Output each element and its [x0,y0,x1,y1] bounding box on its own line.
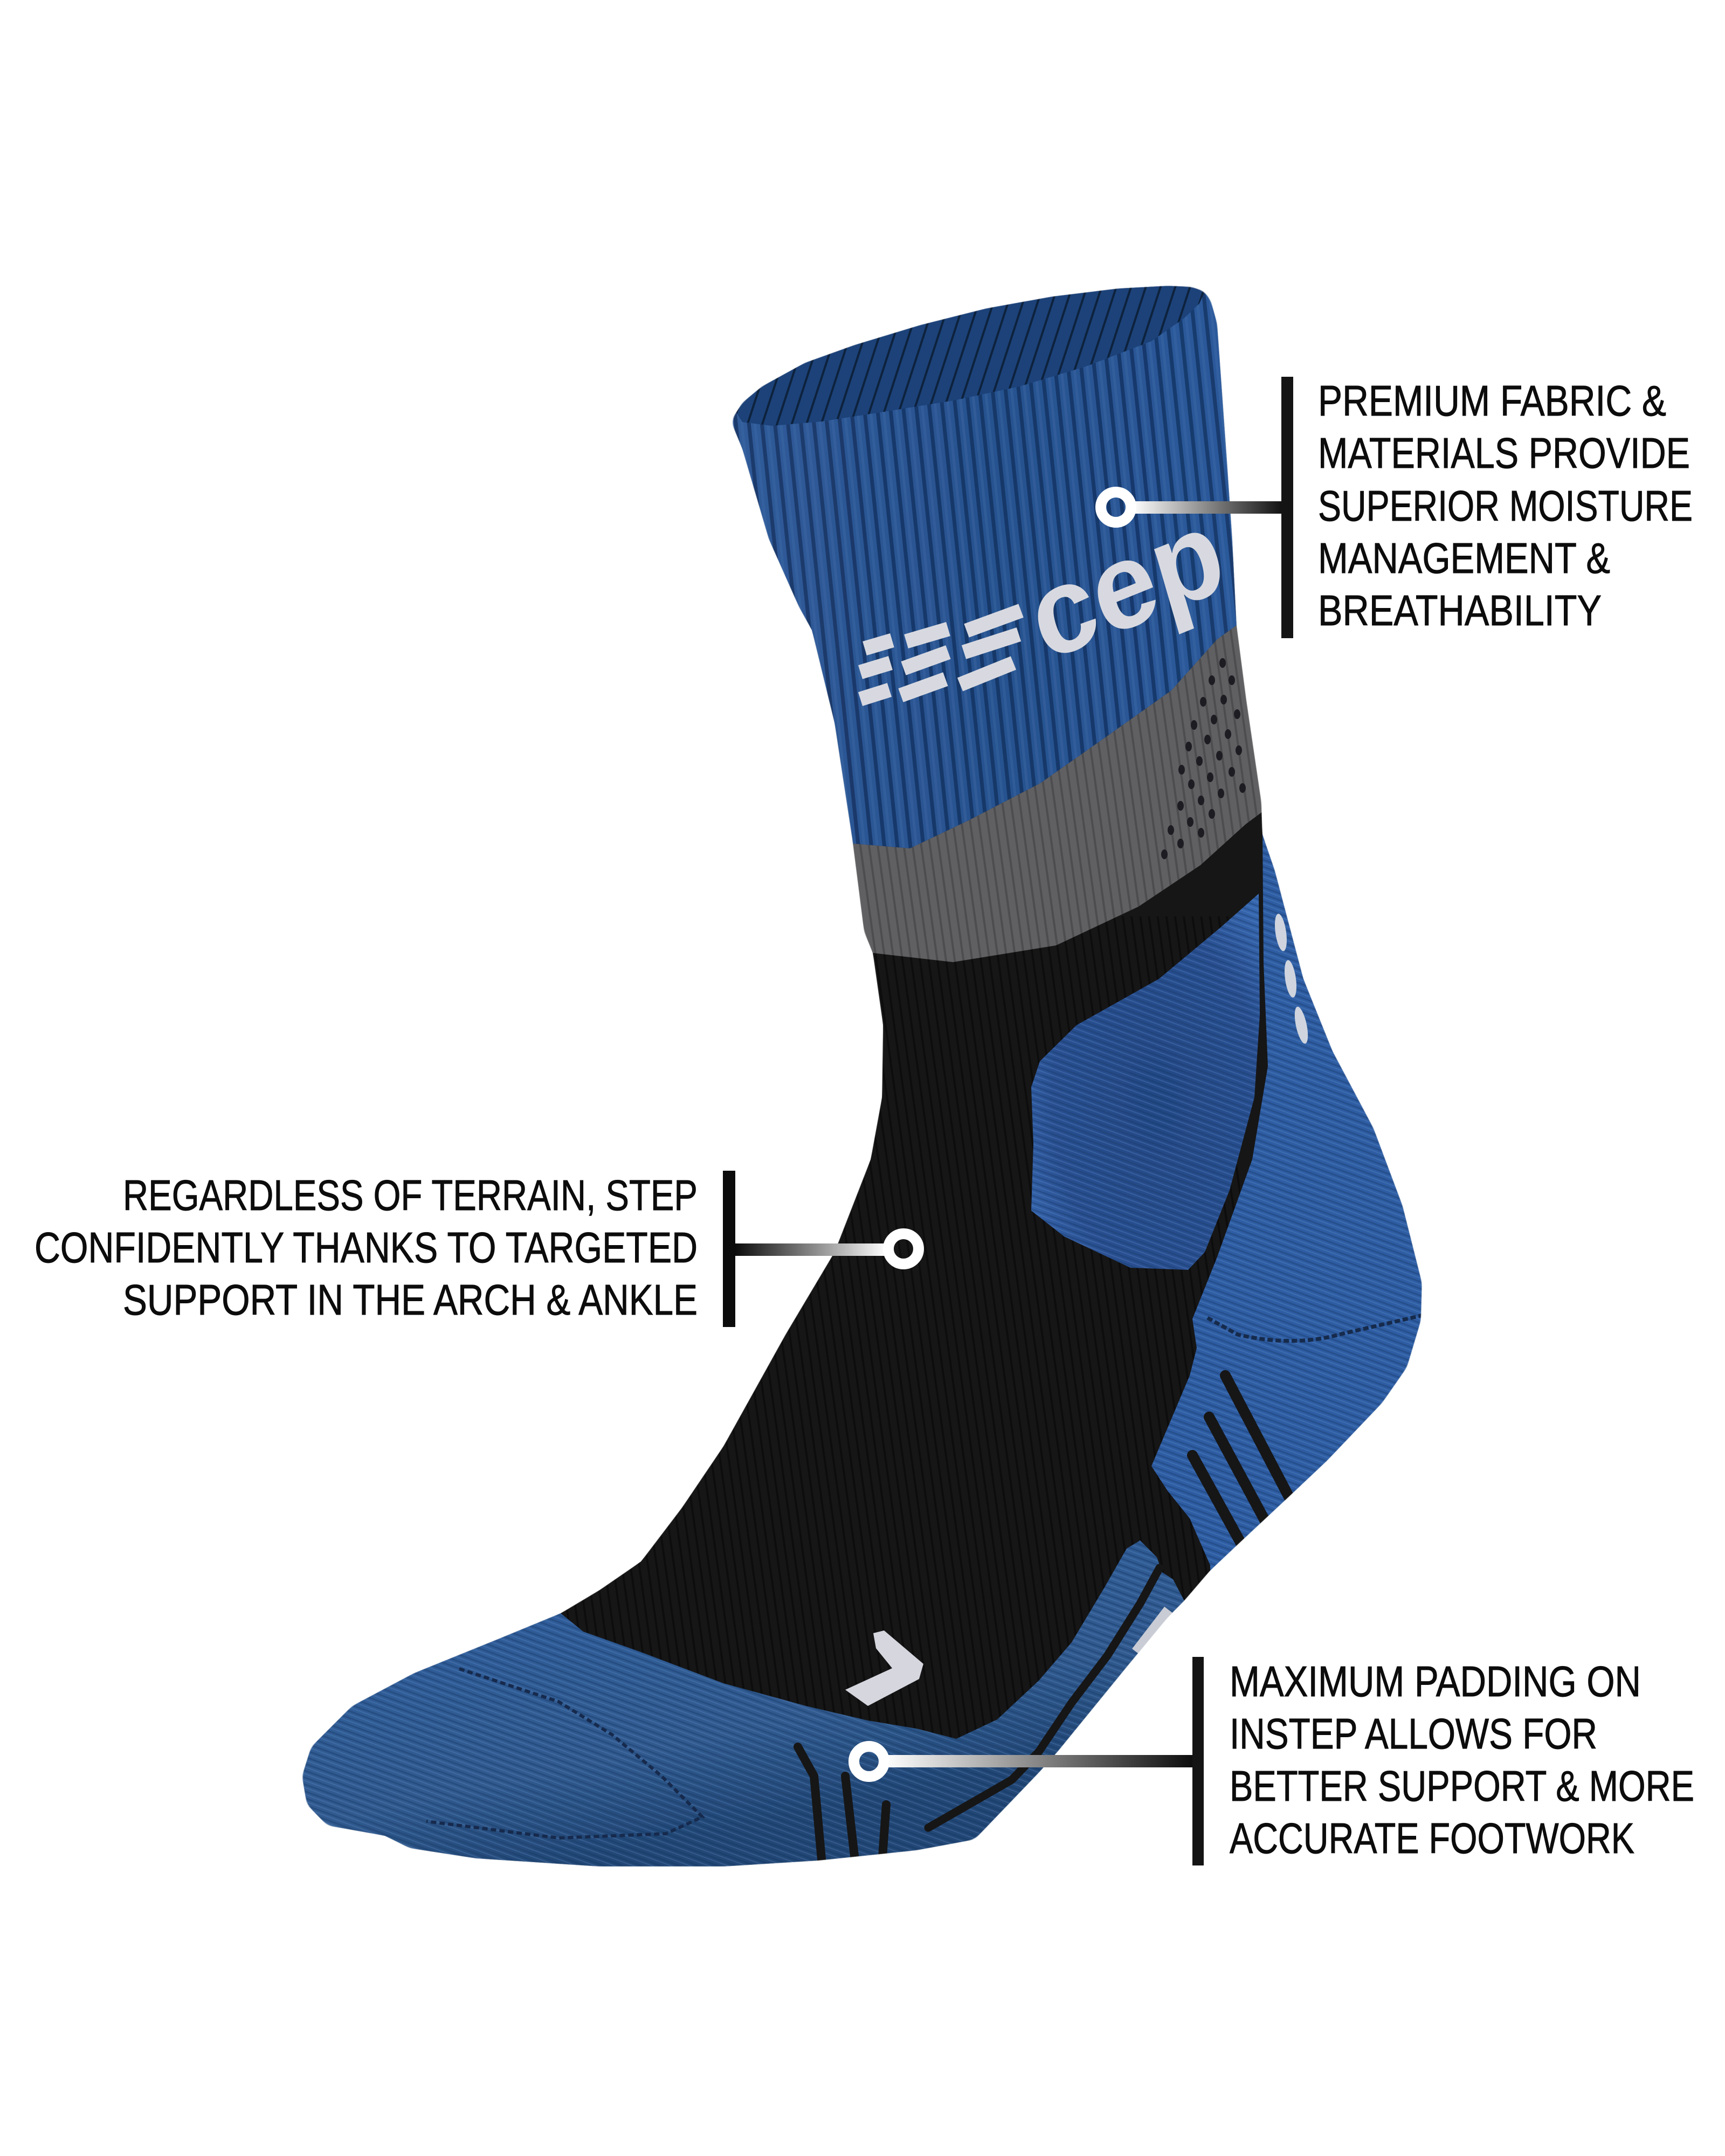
callout text: CONFIDENTLY THANKS TO TARGETED [34,1224,698,1272]
callout text: PREMIUM FABRIC & [1318,377,1666,425]
callout text: BREATHABILITY [1318,586,1602,634]
callout text: SUPPORT IN THE ARCH & ANKLE [123,1276,698,1324]
vertical bar [1281,377,1293,638]
callout text: REGARDLESS OF TERRAIN, STEP [123,1171,698,1219]
grey band [841,625,1267,962]
callout text: ACCURATE FOOTWORK [1230,1814,1634,1862]
callout text: MAXIMUM PADDING ON [1230,1657,1641,1705]
callout: arch and ankle support [34,1171,919,1327]
sock silhouette: black base [270,270,1455,1887]
light spot on the sole [1138,1612,1171,1654]
vertical bar [1192,1657,1204,1865]
cep logo on the cuff [860,482,1238,699]
reflective marks on the achilles [1273,913,1310,1045]
wave stripes of the logo [860,611,1021,699]
callout text [1318,377,1693,634]
marker ring [888,1234,919,1264]
vertical bar [723,1171,735,1327]
cep logo on the cuff: cep [1014,482,1238,687]
connector line [735,1243,887,1256]
callout: premium fabric [1101,377,1693,638]
ventilation dots on the grey band [1161,658,1246,859]
blue forefoot and toe [270,1540,1202,1887]
heel seam [1208,1315,1423,1341]
blue ankle patch [1031,894,1260,1270]
black line along the sole [928,1568,1160,1828]
foot logo mark [845,1630,923,1706]
callout: instep padding [854,1657,1694,1865]
connector line [884,1755,1194,1767]
blue cuff and upper leg [701,270,1240,848]
callout text: MANAGEMENT & [1318,534,1610,582]
callout text [1230,1657,1694,1862]
connector line [1132,501,1286,514]
marker ring [854,1746,884,1777]
marker ring [1101,492,1131,522]
black stripes on the heel [1192,1376,1289,1543]
blue heel and back of the ankle [1151,834,1455,1571]
toe seam [426,1669,702,1838]
inside of cuff opening [728,280,1208,426]
black leg rib texture [485,916,1240,1779]
callout text: INSTEP ALLOWS FOR [1230,1710,1597,1758]
callout text [34,1171,698,1324]
black stripes on the toe [798,1747,886,1865]
product image: hiking sock [270,270,1455,1887]
